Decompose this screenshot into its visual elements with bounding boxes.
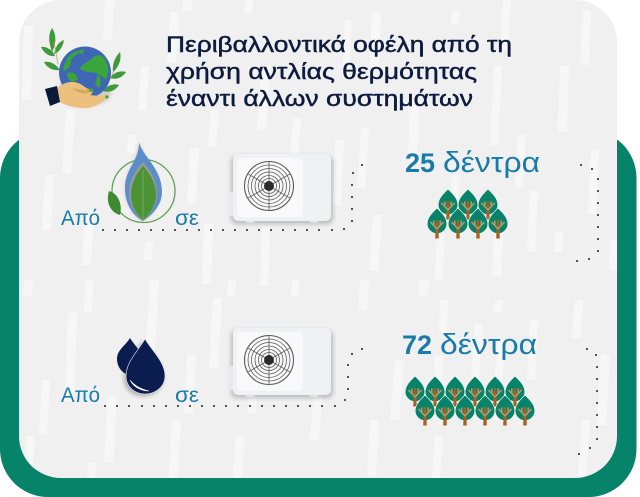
green backing frame [0,130,636,497]
row 2: oil to heat pump [61,328,598,455]
title: Περιβαλλοντικά οφέλη από τη [166,32,512,57]
globe [59,46,111,98]
label: σε: σε [175,384,199,407]
dotted connector left [102,164,363,231]
title [166,32,512,111]
background stripes [26,458,34,468]
label: Από: Από [61,207,100,230]
title: χρήση αντλίας θερμότητας [166,59,477,84]
olive branches [41,28,126,92]
icon: group of 12 trees [405,376,535,426]
title: έναντι άλλων συστημάτων [166,86,473,111]
icon: group of 7 trees [427,189,508,238]
icon: oil drops [117,338,165,396]
row 2: oil to heat pump: δέντρα [440,329,537,361]
dotted connector left [104,348,363,407]
icon: heat pump outdoor unit [228,328,333,398]
row 1: gas to heat pump: δέντρα [443,147,540,179]
icon: gas flame with leaf [108,142,175,222]
dotted connector right [578,348,598,455]
label: Από: Από [61,384,100,407]
icon shadow [57,78,111,106]
hand [56,82,110,108]
cuff [45,86,60,106]
row 1: gas to heat pump [61,142,599,262]
icon: heat pump outdoor unit [228,154,333,224]
dotted connector right [576,164,599,262]
value: 25 trees: 25 [405,148,435,178]
value: 72 trees: 72 [402,330,432,360]
icon: globe in hand with olive branches [41,28,126,108]
label: σε: σε [175,207,199,230]
